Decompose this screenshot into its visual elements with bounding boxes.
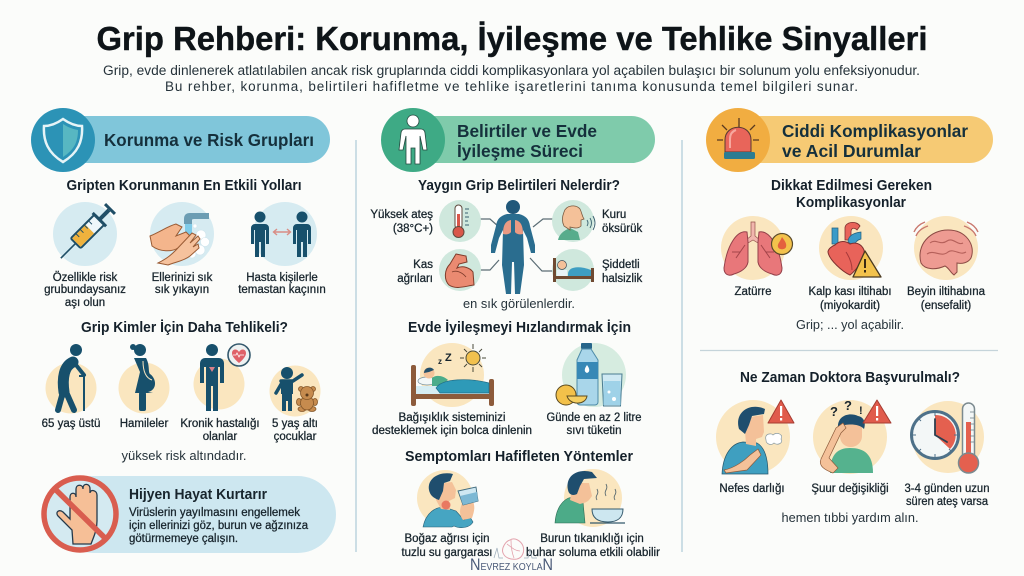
labels: symptoms: halsizlik	[602, 273, 643, 285]
heading: semptom yöntemleri: Semptomları Hafifleten Yöntemler	[405, 448, 633, 465]
icon: altered consciousness: ?	[830, 404, 838, 419]
icon: gargling	[417, 470, 478, 528]
icon: elderly person	[46, 344, 96, 414]
header: korunma: Korunma ve Risk Grupları	[104, 130, 314, 150]
watermark logo: NEVREZ KOYLAN	[470, 555, 553, 574]
labels: symptoms: (38°C+)	[393, 223, 433, 235]
icon: water and lemon	[556, 343, 626, 407]
label row: risk groups: 5 yaş altı	[272, 418, 318, 430]
labels: symptoms	[370, 209, 643, 285]
icon: thermometer	[439, 200, 481, 242]
labels: complications: Zatürre	[734, 286, 772, 298]
icon: chronic illness	[194, 344, 250, 411]
icon: brain encephalitis	[914, 216, 978, 280]
labels: complications: Kalp kası iltihabı	[808, 286, 892, 298]
icon: altered consciousness: ?	[844, 398, 852, 413]
icon: clock and thermometer	[912, 401, 984, 473]
icon: bed fatigue	[552, 249, 594, 291]
label: el yıkama: Ellerinizi sık	[152, 272, 213, 284]
label row: risk groups: 65 yaş üstü	[42, 418, 100, 430]
labels: recovery: sıvı tüketin	[567, 425, 621, 437]
heading: dikkat edilmesi gereken: Dikkat Edilmesi Gereken	[771, 177, 932, 194]
callout: hijyen: için ellerinizi göz, burun ve ağzınıza	[129, 520, 309, 532]
labels: recovery: desteklemek için bolca dinlenin	[372, 425, 532, 437]
labels: symptoms: Kuru	[602, 209, 626, 221]
label: aşı: Özellikle risk	[53, 272, 118, 284]
heading: evde iyileşme: Evde İyileşmeyi Hızlandırmak İçin	[408, 319, 631, 336]
watermark logo	[470, 539, 553, 574]
header: belirtiler: İyileşme Süreci	[457, 141, 583, 161]
text: en sık görülenler: en sık görülenlerdir.	[463, 296, 575, 311]
title: Grip Rehberi: Korunma, İyileşme ve Tehlike Sinyalleri	[96, 21, 928, 58]
label row: risk groups	[42, 418, 318, 443]
intro text	[103, 63, 920, 94]
labels: complications: (miyokardit)	[820, 300, 880, 312]
icon: child with teddy	[270, 366, 320, 416]
icon: pregnant woman	[118, 344, 170, 414]
label row: risk groups: Kronik hastalığı	[180, 418, 260, 430]
label row: risk groups: olanlar	[203, 431, 237, 443]
icon: altered consciousness	[813, 398, 891, 474]
heading: korunma yolları: Gripten Korunmanın En Etkili Yolları	[66, 177, 302, 194]
icon: syringe	[53, 201, 118, 266]
icon: distance from sick people	[251, 202, 317, 266]
body diagram with connectors	[480, 200, 553, 294]
panel: ciddi komplikasyonlar	[700, 108, 998, 525]
heading: dikkat edilmesi gereken: Komplikasyonlar	[796, 194, 906, 211]
label: aşı	[44, 272, 126, 309]
labels: when to see a doctor: süren ateş varsa	[906, 496, 989, 508]
labels: symptoms: öksürük	[602, 223, 643, 235]
text: grip yol açabilir: Grip; ... yol açabilir.	[796, 317, 904, 332]
header: korunma	[31, 108, 330, 172]
label row: risk groups: Hamileler	[120, 418, 168, 430]
labels: recovery: Günde en az 2 litre	[546, 412, 642, 424]
label row: risk groups: çocuklar	[274, 431, 317, 443]
labels: symptoms: Şiddetli	[602, 259, 640, 271]
icon: muscle	[439, 249, 481, 291]
labels: recovery	[372, 412, 642, 437]
labels: when to see a doctor	[719, 483, 990, 508]
label: el yıkama: sık yıkayın	[155, 284, 209, 296]
icon: no face touching hand	[44, 478, 116, 550]
labels: recovery: Bağışıklık sisteminizi	[398, 412, 506, 424]
icon: steam inhalation	[555, 469, 625, 527]
heading: yaygın belirtiler: Yaygın Grip Belirtileri Nelerdir?	[418, 177, 620, 194]
labels: complications: Beyin iltihabına	[907, 286, 986, 298]
heading: dikkat edilmesi gereken	[771, 177, 932, 211]
callout: hijyen: Virüslerin yayılmasını engellemek	[129, 507, 300, 519]
header: komplikasyonlar: Ciddi Komplikasyonlar	[782, 121, 968, 141]
labels: symptoms: Yüksek ateş	[370, 209, 433, 221]
panel: korunma ve risk grupları	[31, 108, 336, 553]
header: komplikasyonlar	[706, 108, 993, 172]
panel: belirtiler ve evde iyileşme	[370, 108, 660, 559]
icon: rest in bed: Z	[445, 352, 452, 364]
header: belirtiler	[381, 108, 655, 172]
intro text: Bu rehber, korunma, belirtileri hafifletme ve tehlike işaretlerini tanıma konusunda temel bilgileri sunar.	[165, 79, 858, 94]
heading: ne zaman doktora: Ne Zaman Doktora Başvurulmalı?	[740, 369, 960, 386]
label: aşı: aşı olun	[65, 297, 105, 309]
labels: complications: (ensefalit)	[921, 300, 971, 312]
labels: when to see a doctor: Şuur değişikliği	[811, 483, 889, 495]
labels: when to see a doctor: Nefes darlığı	[719, 483, 785, 495]
header: belirtiler: Belirtiler ve Evde	[457, 121, 597, 141]
header: komplikasyonlar: ve Acil Durumlar	[782, 141, 921, 161]
labels: symptom relief: Burun tıkanıklığı için	[540, 533, 644, 545]
label: temastan kaçının: Hasta kişilerle	[246, 272, 318, 284]
labels: symptoms: Kas	[413, 259, 433, 271]
labels: symptom relief: buhar soluma etkili olabilir	[526, 547, 660, 559]
text: yüksek risk: yüksek risk altındadır.	[122, 448, 246, 463]
label: el yıkama	[152, 272, 213, 296]
callout: hijyen: götürmemeye çalışın.	[129, 533, 238, 545]
callout: hijyen: Hijyen Hayat Kurtarır	[129, 486, 267, 503]
icon: shortness of breath	[716, 400, 794, 474]
icon: altered consciousness: !	[859, 405, 863, 417]
label: aşı: grubundaysanız	[44, 284, 126, 296]
labels: symptom relief: Boğaz ağrısı için	[404, 533, 490, 545]
labels: symptom relief: tuzlu su gargarası	[402, 547, 492, 559]
icon: hand washing	[150, 202, 214, 266]
labels: when to see a doctor: 3-4 günden uzun	[904, 483, 990, 495]
icon: dry cough	[552, 200, 595, 242]
icon: lungs pneumonia	[721, 216, 792, 280]
label: temastan kaçının	[238, 272, 326, 296]
labels: complications	[734, 286, 986, 312]
heading: grip kimler için tehlikeli: Grip Kimler İçin Daha Tehlikeli?	[81, 319, 288, 336]
labels: symptom relief	[402, 533, 660, 559]
icon: rest in bed	[411, 343, 494, 407]
labels: symptoms: ağrıları	[397, 273, 433, 285]
text: hemen tıbbi yardım: hemen tıbbi yardım alın.	[782, 510, 918, 525]
icon: rest in bed: z	[438, 357, 442, 366]
label: temastan kaçının: temastan kaçının	[238, 284, 326, 296]
icon: heart myocarditis	[819, 216, 883, 280]
callout: hijyen	[44, 476, 336, 553]
intro text: Grip, evde dinlenerek atlatılabilen ancak risk gruplarında ciddi komplikasyonlara yol açabilen bulaşıcı bir solunum yolu enfeksiyonudur.	[103, 63, 920, 78]
